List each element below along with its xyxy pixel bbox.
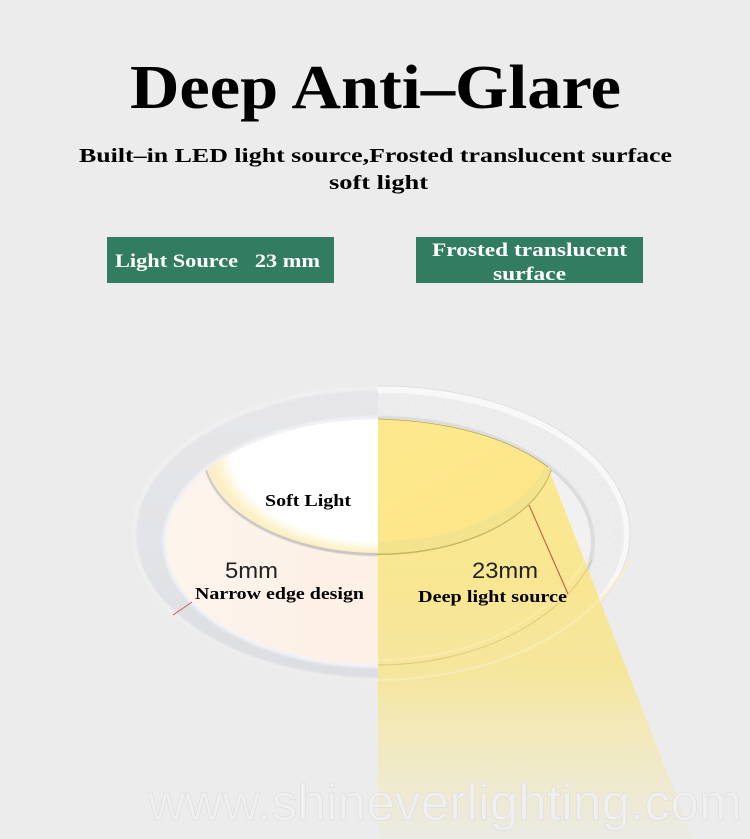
label: 5mm: 5mm: [225, 558, 278, 583]
title: Deep Anti–Glare: [130, 54, 621, 122]
downlight: right half, deep light source: [378, 386, 630, 602]
subtitle: Built–in LED light source,Frosted translucent surface: [79, 145, 672, 167]
downlight: left half, soft light: [138, 418, 378, 678]
badge: frosted translucent surface: surface: [493, 264, 566, 285]
label: deep light source: Deep light source: [418, 587, 567, 606]
measure line: 5mm: [173, 602, 192, 615]
subtitle: soft light: [329, 172, 428, 194]
light beam: [378, 419, 693, 839]
label: narrow edge design: Narrow edge design: [195, 584, 364, 603]
label: soft light: Soft Light: [265, 491, 352, 510]
badge: light source: Light Source 23 mm: [115, 251, 320, 272]
badge: light source: [107, 237, 334, 283]
badge: frosted translucent surface: Frosted translucent: [432, 240, 628, 261]
badge: frosted translucent surface: [416, 237, 643, 285]
lower ring edge inside beam: [378, 560, 630, 680]
measure line: 23mm: [529, 505, 568, 594]
watermark: www.shineverlighting.com: [147, 774, 742, 831]
label: 23mm: 23mm: [472, 558, 538, 583]
yellow light source disc: [378, 418, 552, 555]
subtitle: [79, 145, 672, 194]
